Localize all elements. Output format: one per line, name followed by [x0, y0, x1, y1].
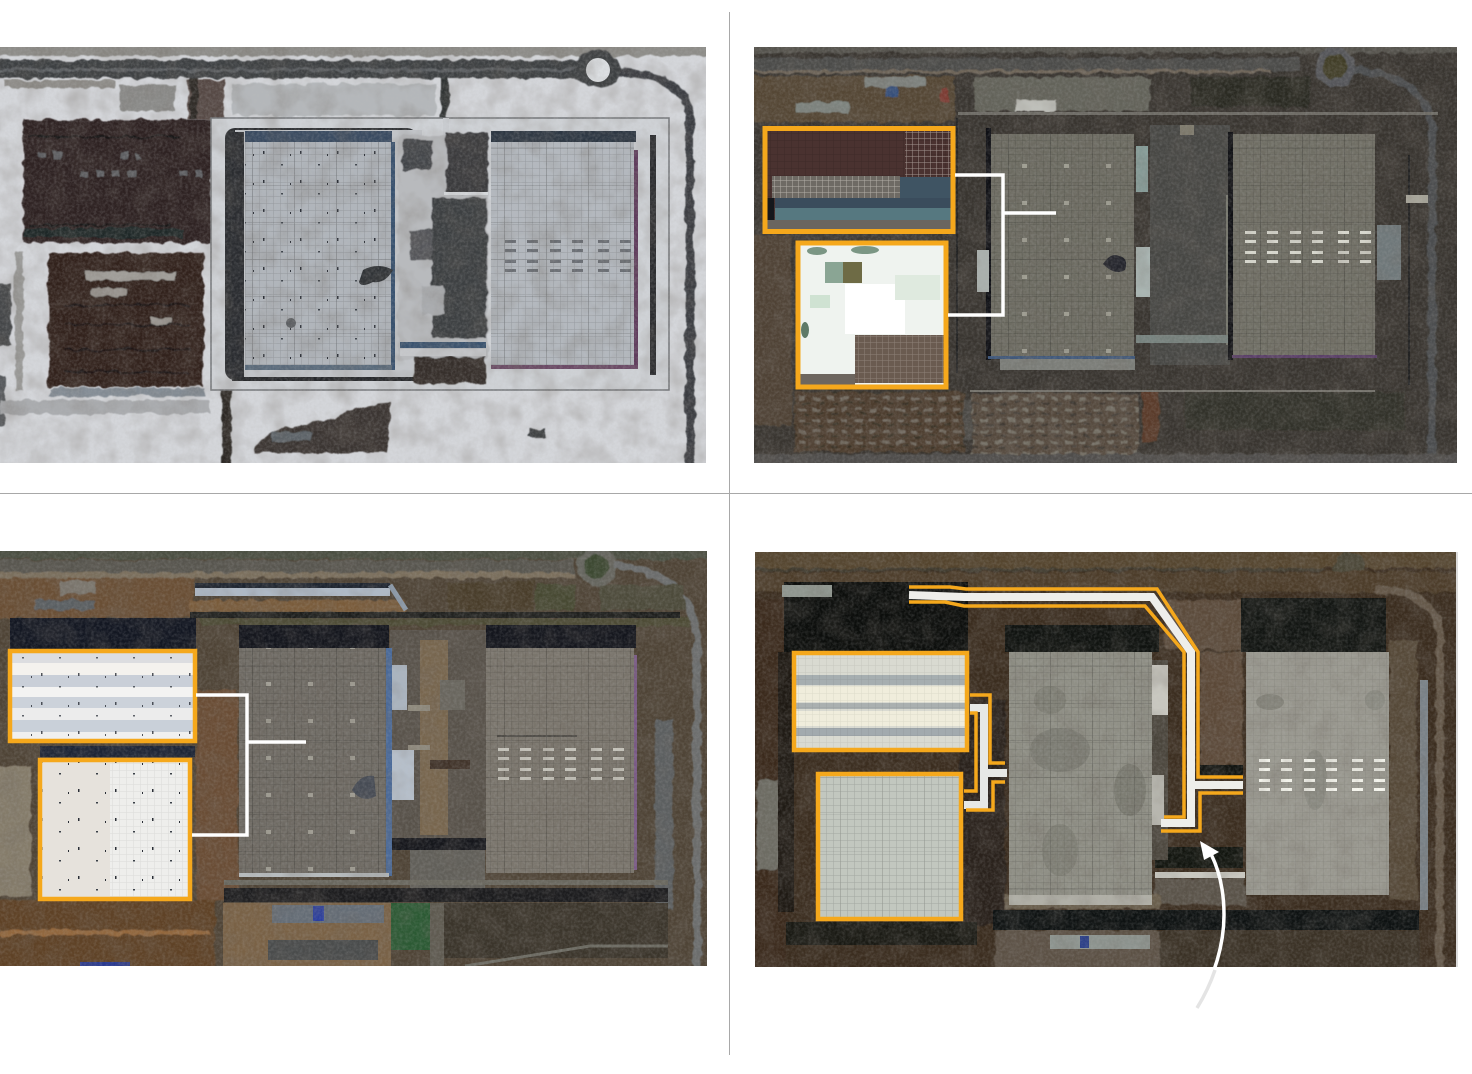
building 1 roof	[977, 128, 1150, 370]
panel: winter satellite view with snow	[0, 44, 711, 470]
building 1 roof	[239, 625, 392, 877]
roundabout island	[586, 58, 610, 82]
site lines	[956, 112, 1438, 385]
roads and snow ground	[0, 44, 711, 470]
connector pipeline between buildings	[964, 695, 1007, 810]
orange outlined steel frame upper building	[765, 128, 953, 232]
shadows and strips	[778, 582, 1428, 949]
dark shadow left of upper building	[10, 618, 196, 652]
panel: second stage satellite view	[750, 44, 1460, 470]
orange outlined white roof lower building	[40, 760, 190, 899]
panel: fourth stage satellite view with pipeline	[750, 548, 1460, 970]
building 2 roof	[486, 625, 637, 873]
building 1 roof	[1009, 652, 1152, 905]
centre yard	[390, 630, 487, 890]
orange outlined upper building roof	[794, 653, 967, 750]
long pipeline from top to central buildings	[909, 587, 1243, 831]
bottom yard	[750, 392, 1460, 466]
ice frame and blue band between buildings	[400, 192, 488, 356]
perimeter line	[970, 390, 1375, 392]
building 2 roof	[1246, 652, 1389, 895]
ground and shadows	[750, 548, 1460, 970]
panel: third stage satellite view	[0, 547, 712, 970]
roads and ground	[750, 44, 1460, 470]
bottom yards and green plot	[80, 880, 668, 967]
brown cleared field upper left	[23, 120, 211, 243]
white connector bracket pointing to building	[192, 695, 306, 835]
snow lanes enclosing buildings	[211, 118, 669, 390]
building 2 roof	[1228, 132, 1401, 360]
top blue building strip	[195, 583, 406, 610]
arrow: curved white arrow pointing to pipeline end	[1197, 841, 1224, 1008]
roads and ground	[0, 547, 712, 970]
dark strip between white roofs	[40, 746, 195, 757]
building 2 snowy roof	[491, 131, 638, 369]
white connector bracket pointing to building	[948, 175, 1056, 315]
orange outlined partly clad lower building	[798, 243, 946, 387]
building 1 snowy roof	[245, 131, 395, 370]
concourse between buildings	[1136, 125, 1231, 365]
orange outlined white roof upper building	[10, 651, 195, 741]
bottom snow area and pond	[255, 403, 545, 453]
orange outlined lower building roof	[818, 774, 961, 919]
dark perimeter strip	[190, 612, 680, 618]
brown cleared field lower left	[48, 253, 205, 396]
central dark ground	[398, 133, 488, 383]
